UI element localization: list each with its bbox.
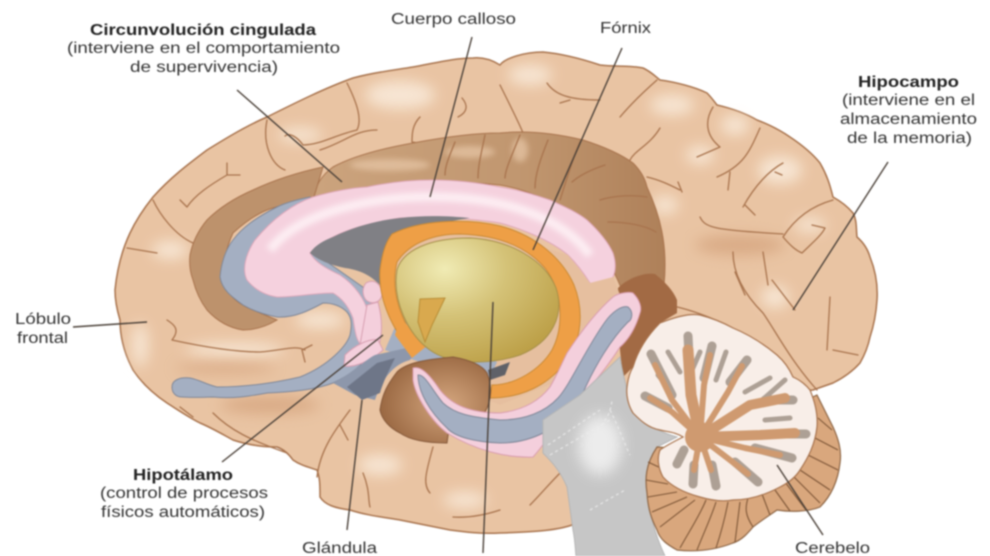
pink rostrum forms xyxy=(344,281,383,366)
label: circunvolución cingulada: de supervivencia) xyxy=(130,59,278,76)
blue wedge under thalamus xyxy=(385,320,497,378)
temporal horn pink xyxy=(413,292,641,457)
label: hipotálamo: (control de procesos xyxy=(100,485,268,502)
fornix ring xyxy=(380,221,580,398)
dark spot under thalamus xyxy=(488,362,510,380)
tree hub xyxy=(685,422,715,452)
label: circunvolución cingulada: (interviene en el comportamiento xyxy=(67,40,340,57)
folia lines xyxy=(646,418,838,550)
thalamus xyxy=(396,238,559,362)
label: hipocampo xyxy=(840,74,977,147)
tree core xyxy=(650,350,795,474)
label: hipotálamo: físicos automáticos) xyxy=(101,504,265,521)
label: hipocampo: almacenamiento xyxy=(840,111,977,128)
white medulla xyxy=(627,314,817,501)
label: hipotálamo: Hipotálamo xyxy=(133,467,233,484)
label: circunvolución cingulada: Circunvolución cingulada xyxy=(90,22,316,39)
blue base region xyxy=(333,345,420,400)
label: hipocampo: (interviene en el xyxy=(842,92,975,109)
label: cuerpo calloso: Cuerpo calloso xyxy=(391,11,516,28)
central beige area xyxy=(380,225,622,405)
upper cingulate band xyxy=(313,132,665,290)
cerebellum xyxy=(627,314,841,551)
gyri lines xyxy=(127,80,858,517)
corpus callosum xyxy=(245,180,615,345)
pointer lines xyxy=(73,37,888,553)
band shading xyxy=(350,138,528,171)
label: hipocampo: Hipocampo xyxy=(858,74,959,91)
label: lóbulo frontal: Lóbulo xyxy=(15,311,71,328)
highlights xyxy=(132,65,826,508)
cingulate gyrus crescent xyxy=(190,167,323,330)
cerebrum xyxy=(115,52,877,533)
tree grey tips xyxy=(645,336,806,486)
posterior brown patch xyxy=(618,274,677,377)
dark pituitary region xyxy=(347,358,395,400)
amygdala and hippocampus head xyxy=(380,357,491,443)
grey cavity xyxy=(310,216,470,285)
label: lóbulo frontal: frontal xyxy=(17,330,68,347)
label: hipocampo: de la memoria) xyxy=(847,130,972,147)
blue ventricle xyxy=(172,197,380,398)
outer folia xyxy=(646,395,841,551)
brain stem xyxy=(543,357,677,556)
label: lóbulo frontal xyxy=(15,311,71,347)
orange junction xyxy=(395,318,428,358)
temporal horn blue xyxy=(418,307,632,443)
label: fórnix: Fórnix xyxy=(600,20,651,37)
label: hipotálamo xyxy=(100,467,268,521)
label: circunvolución cingulada xyxy=(67,22,340,76)
small orange fork xyxy=(418,298,445,342)
